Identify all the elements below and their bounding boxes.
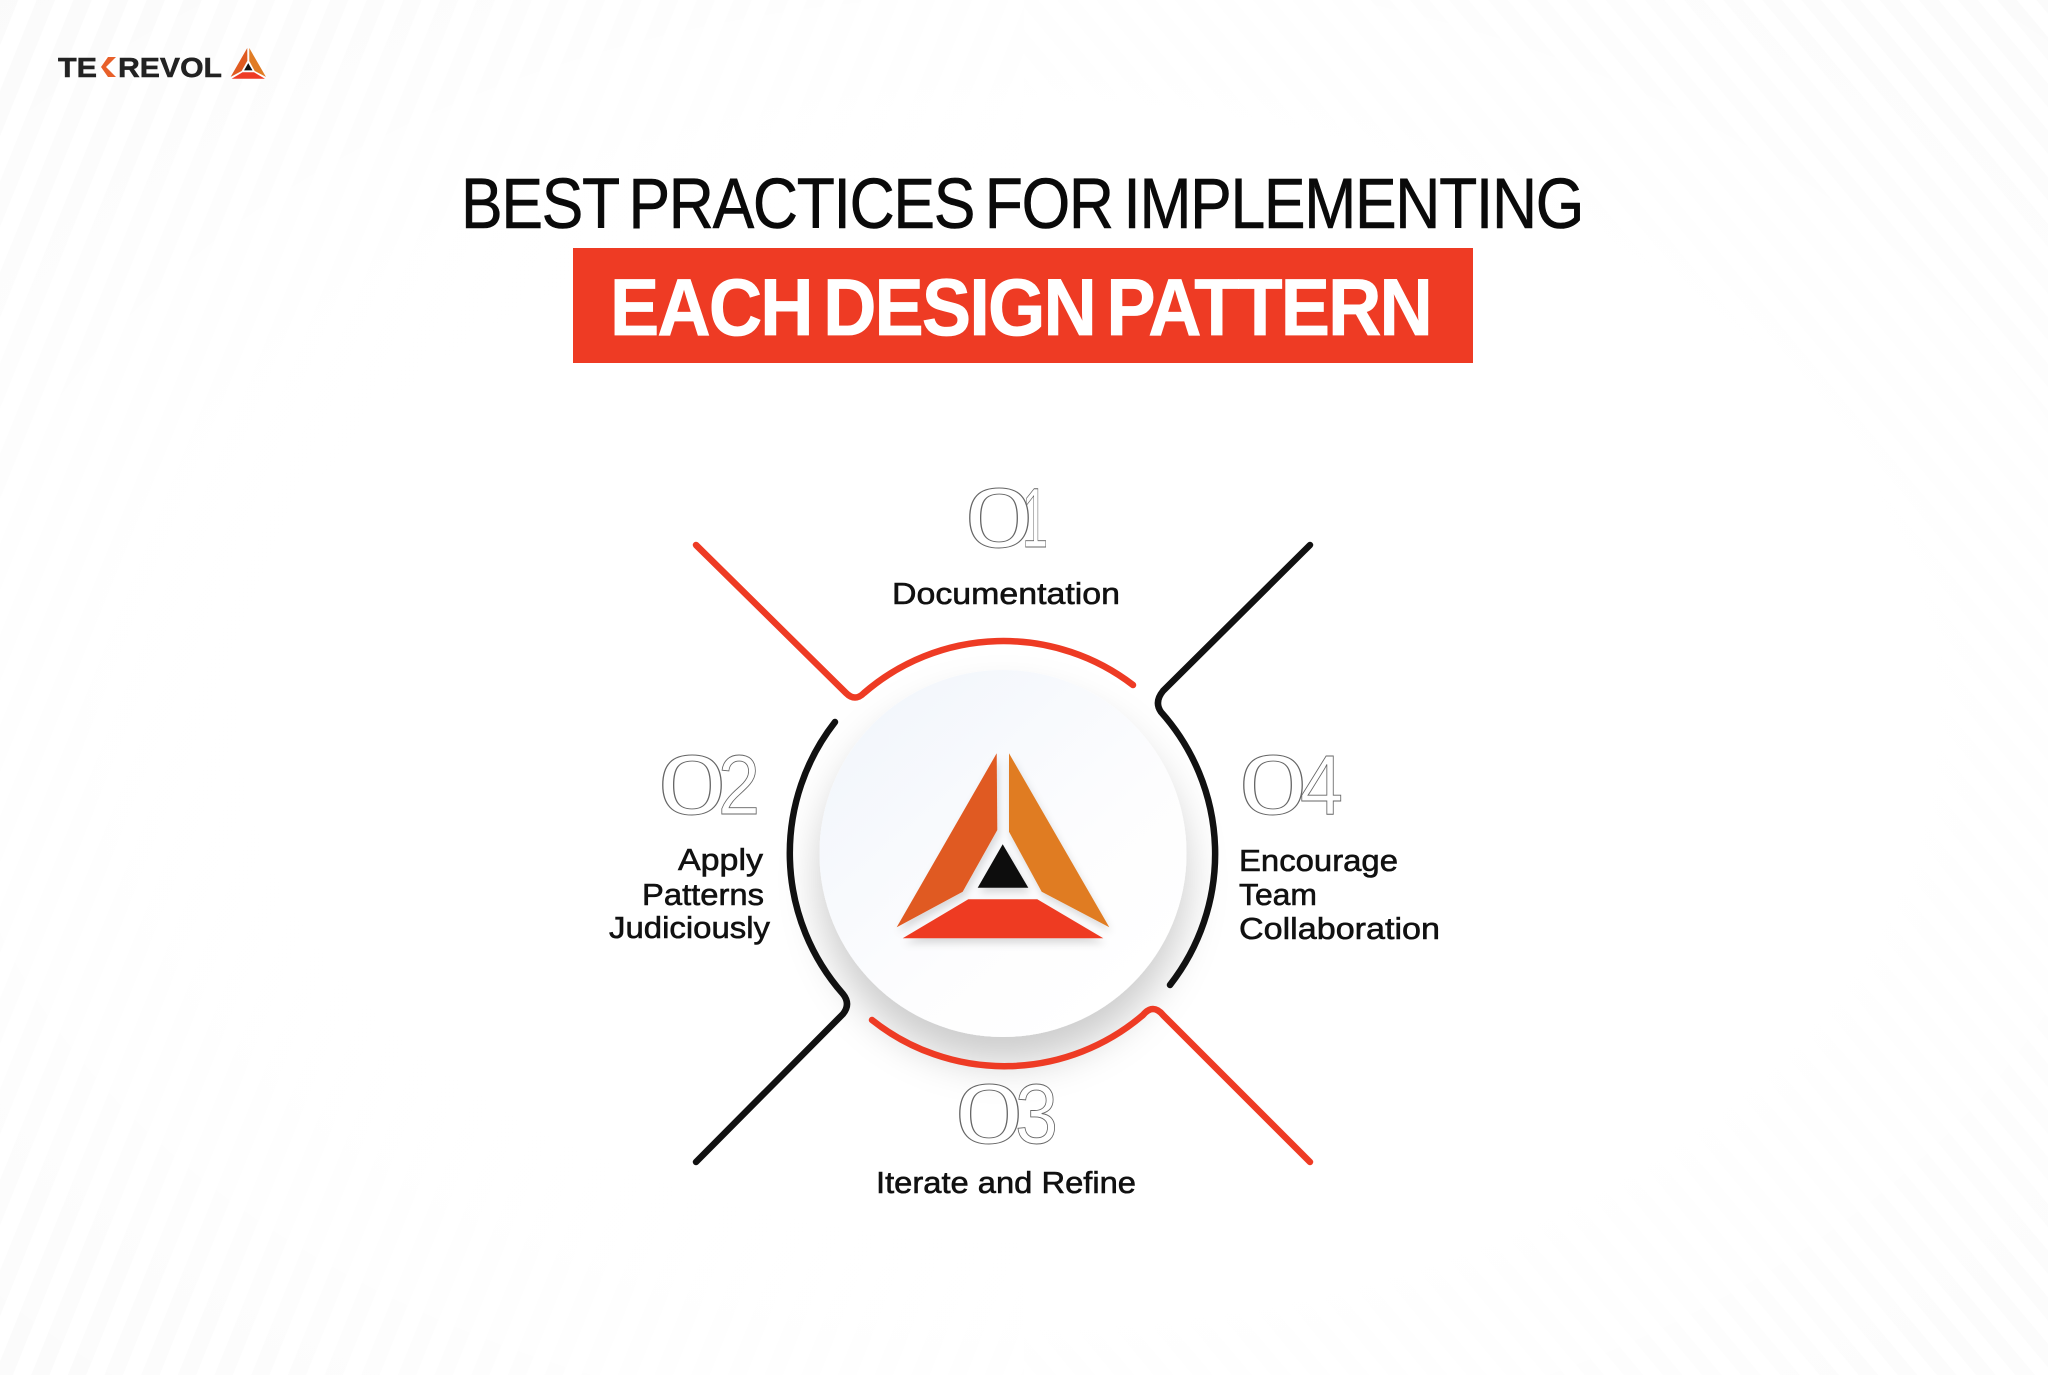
number 04: 4 [1300,738,1343,832]
connector: left black [696,722,847,1162]
title: BEST PRACTICES FOR IMPLEMENTING [461,165,1583,244]
logo: Tekrevol: REVOL [118,52,222,83]
step 04: Encourage Team Collaboration [1239,738,1440,946]
step 04: Encourage Team Collaboration: Collaboration [1239,911,1440,946]
step 03: Iterate and Refine [876,1067,1136,1200]
step 02: Apply Patterns Judiciously [609,738,771,945]
step 03: Iterate and Refine: Iterate and Refine [876,1165,1136,1200]
number 04 [1239,738,1343,832]
number 01 [965,471,1048,565]
number 01: 0 [965,471,1033,565]
logo: Tekrevol [58,48,266,83]
step 04: Encourage Team Collaboration: Team [1239,877,1317,912]
step 01: Documentation: Documentation [892,576,1120,611]
icon: triangle logo [897,753,1109,938]
step 02: Apply Patterns Judiciously: Apply [678,842,764,877]
central disc with logo [820,670,1186,1037]
connector: bottom red [872,1009,1310,1162]
connector: top red [696,545,1133,698]
step 02: Apply Patterns Judiciously: Judiciously [609,910,771,945]
number 02 [658,738,760,832]
step 02: Apply Patterns Judiciously: Patterns [642,877,764,912]
number 03: 0 [955,1067,1023,1161]
number 03: 3 [1015,1067,1058,1161]
number 03 [955,1067,1058,1161]
title [461,165,1583,363]
logo chevron [101,57,116,77]
logo: Tekrevol: TE [58,52,97,83]
step 04: Encourage Team Collaboration: Encourage [1239,843,1398,878]
number 01: 1 [1022,471,1048,565]
number 02: 0 [658,738,726,832]
number 02: 2 [718,738,760,832]
connector: right black [1158,545,1310,985]
logo triangle [231,48,266,79]
step 01: Documentation [892,471,1120,611]
number 04: 0 [1239,738,1307,832]
title highlight banner: EACH DESIGN PATTERN [610,263,1431,353]
